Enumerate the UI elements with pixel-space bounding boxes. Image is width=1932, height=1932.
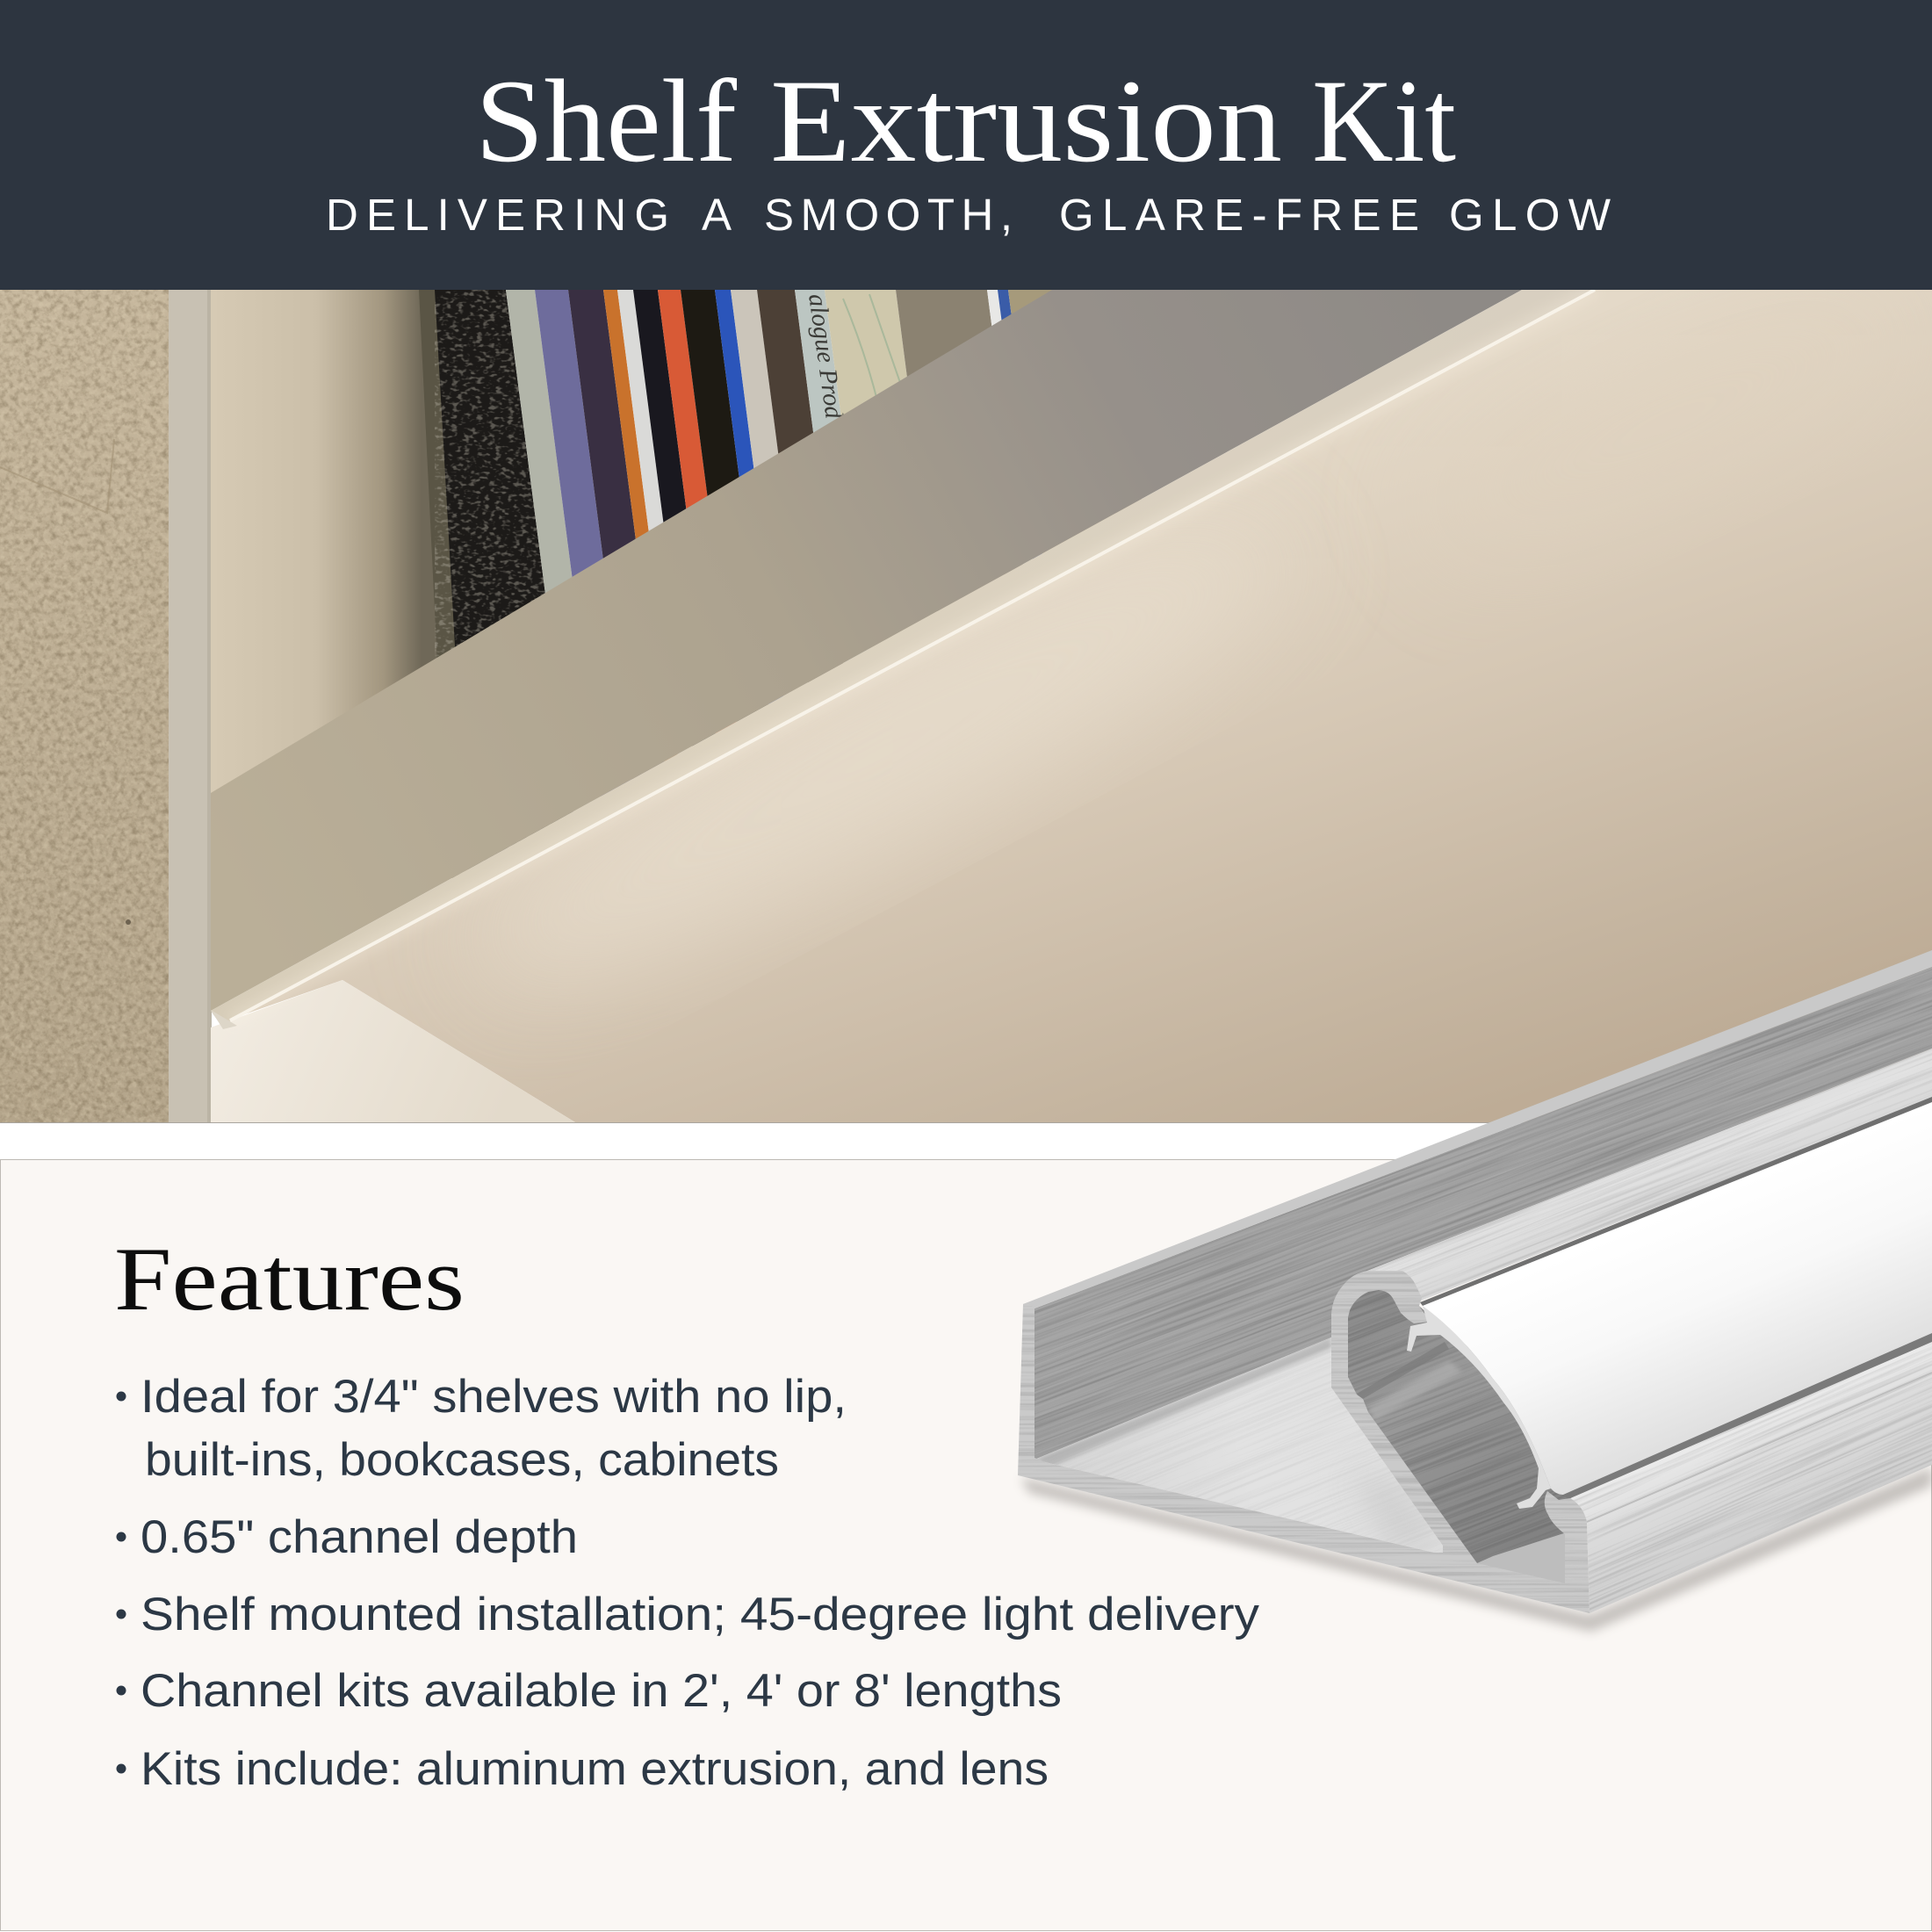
subtitle <box>326 190 1611 240</box>
back panel of shelf <box>211 290 437 793</box>
books <box>419 290 1142 878</box>
lens end thickness and clips <box>1407 1306 1551 1509</box>
lower right outer surface <box>1154 1035 1932 1932</box>
feature list <box>116 1371 1260 1795</box>
back wall inner face <box>1034 967 1932 1459</box>
feature list: Shelf mounted installation; 45-degree light delivery <box>141 1589 1260 1640</box>
feature list: Kits include: aluminum extrusion, and lens <box>141 1743 1049 1795</box>
drop shadow <box>1020 1467 1932 1632</box>
feature list: built-ins, bookcases, cabinets <box>145 1434 779 1486</box>
book spine lettering: alogue Prod <box>803 292 848 421</box>
trim post <box>169 290 212 1122</box>
features heading: Features <box>114 1229 465 1330</box>
title <box>475 56 1456 187</box>
photo: lit bookshelf with extrusion <box>0 239 1932 1122</box>
features panel <box>0 1159 1932 1930</box>
interior floor <box>1477 1531 1572 1590</box>
title: Kit <box>1312 56 1456 187</box>
header band <box>0 0 1932 290</box>
lit panel lower left <box>211 980 575 1122</box>
title: Shelf <box>475 56 737 187</box>
gap above lens <box>1420 1097 1932 1306</box>
subtitle: SMOOTH, <box>764 190 1013 240</box>
product: aluminum extrusion with lens <box>1018 950 1932 1635</box>
subtitle: A <box>702 190 732 240</box>
subtitle: GLARE-FREE <box>1059 190 1419 240</box>
photo bottom rule <box>0 1122 1932 1124</box>
housing top surface <box>981 690 1932 1681</box>
end section profile <box>1010 1265 1598 1625</box>
textured plaster wall <box>0 290 169 1122</box>
shelf front face <box>211 290 1522 1011</box>
lens strip <box>211 290 1595 1026</box>
housing interior <box>1077 1092 1840 1804</box>
ceiling under shelf <box>211 239 1932 1122</box>
title: Extrusion <box>770 56 1282 187</box>
back wall top ridge <box>1023 950 1932 1308</box>
subtitle: GLOW <box>1449 190 1611 240</box>
lens cover <box>1407 1102 1932 1509</box>
LED glow line <box>230 290 1595 1020</box>
feature list: Ideal for 3/4" shelves with no lip, <box>141 1371 847 1423</box>
lower lens gap <box>1556 1331 1932 1499</box>
feature list: 0.65" channel depth <box>141 1511 578 1563</box>
feature list: Channel kits available in 2', 4' or 8' lengths <box>141 1665 1062 1717</box>
extrusion end cap <box>211 1010 237 1029</box>
floor of channel <box>1036 1337 1443 1553</box>
subtitle: DELIVERING <box>326 190 669 240</box>
